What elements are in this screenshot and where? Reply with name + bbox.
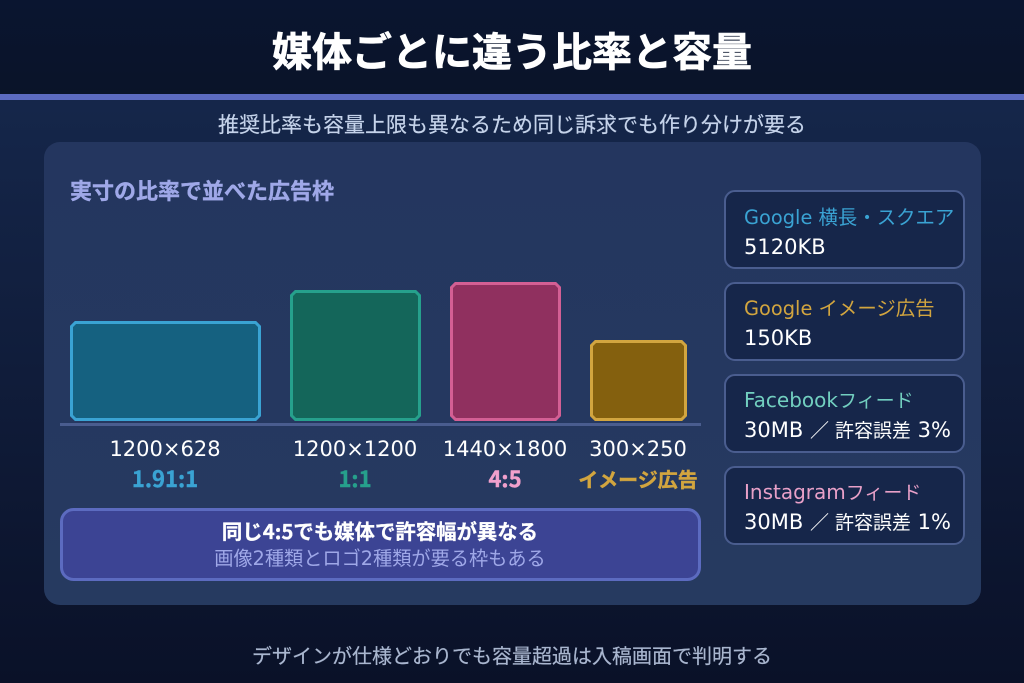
panel: main bbox=[44, 142, 981, 605]
card: Facebook feed: Facebookフィード bbox=[744, 388, 914, 412]
frame: image ad: 300×250 bbox=[589, 437, 687, 461]
frame: 1.91:1 bbox=[72, 322, 260, 494]
callout: 同じ4:5でも媒体で許容幅が異なる bbox=[222, 515, 538, 545]
callout: 画像2種類とロゴ2種類が要る枠もある bbox=[214, 547, 546, 570]
frame: 4:5: 4:5 bbox=[488, 462, 522, 494]
callout bbox=[62, 510, 700, 580]
card: Google image ad: 150KB bbox=[744, 326, 812, 350]
card: Google image ad bbox=[725, 283, 964, 360]
frame: 1:1 bbox=[292, 292, 420, 494]
frame: image ad bbox=[578, 342, 698, 493]
frame: 1:1: 1200×1200 bbox=[293, 437, 417, 461]
card: Google landscape/square bbox=[725, 191, 964, 268]
frame: 1.91:1: 1200×628 bbox=[109, 437, 221, 461]
card: Google landscape/square: 5120KB bbox=[744, 235, 826, 259]
frame: 1:1: 1:1 bbox=[338, 462, 372, 494]
card: Facebook feed bbox=[725, 375, 964, 452]
card: Google landscape/square: Google 横長・スクエア bbox=[744, 206, 954, 229]
frame: 4:5 bbox=[443, 284, 567, 494]
chart: ad frames bbox=[60, 284, 701, 494]
title: 媒体ごとに違う比率と容量 bbox=[272, 20, 752, 78]
frame: 4:5: 1440×1800 bbox=[443, 437, 567, 461]
panel heading: 実寸の比率で並べた広告枠 bbox=[70, 174, 334, 206]
header band bbox=[0, 0, 1024, 100]
footer note: デザインが仕様どおりでも容量超過は入稿画面で判明する bbox=[252, 640, 772, 669]
card: Instagram feed: 30MB ／ 許容誤差 1% bbox=[744, 510, 951, 534]
card: Google image ad: Google イメージ広告 bbox=[744, 297, 934, 320]
frame: 1.91:1: 1.91:1 bbox=[132, 462, 198, 494]
card: Instagram feed bbox=[725, 467, 964, 544]
frame: image ad: イメージ広告 bbox=[578, 464, 698, 493]
card: Facebook feed: 30MB ／ 許容誤差 3% bbox=[744, 418, 951, 442]
subtitle: 推奨比率も容量上限も異なるため同じ訴求でも作り分けが要る bbox=[218, 109, 806, 139]
card: Instagram feed: Instagramフィード bbox=[744, 480, 921, 504]
